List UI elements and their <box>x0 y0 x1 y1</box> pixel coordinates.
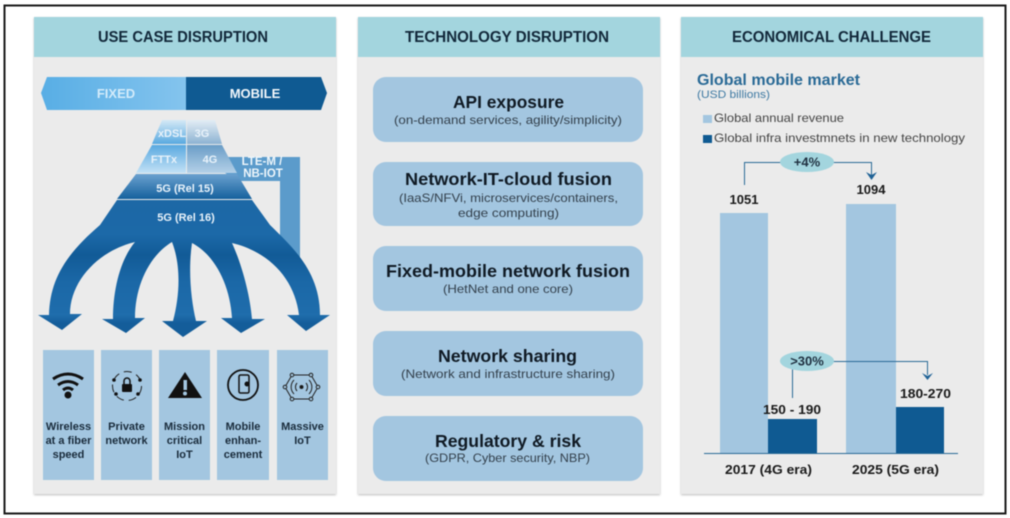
panel background <box>358 17 660 494</box>
pyramid: 5G Rel 15 <box>117 174 252 199</box>
banner: mobile <box>186 77 327 110</box>
heading: technology disruption: TECHNOLOGY DISRUPTION <box>405 29 609 46</box>
pyramid: xDSL <box>152 120 186 144</box>
arrow callout: >30% <box>780 351 933 398</box>
bar chart: 150 - 190 <box>763 402 821 417</box>
card: mission critical IoT <box>159 350 210 480</box>
card: Network-IT-cloud fusion: Network-IT-cloud fusion <box>405 169 612 189</box>
panel background <box>681 17 983 494</box>
heading: economical challenge: ECONOMICAL CHALLENGE <box>732 29 931 46</box>
pyramid: 3G <box>187 120 222 144</box>
card: private network <box>101 350 152 480</box>
heading: use case disruption: USE CASE DISRUPTION <box>98 29 268 46</box>
arrow callout: +4% <box>744 152 877 185</box>
banner: mobile: MOBILE <box>230 86 281 101</box>
chart title <box>697 72 861 101</box>
bar chart: 1051 <box>730 192 758 207</box>
card: Network-IT-cloud fusion: edge computing) <box>458 206 559 220</box>
bar chart: 1094 <box>857 182 886 197</box>
card: mobile enhancement: enhan- <box>225 435 261 447</box>
pyramid: 4G <box>187 145 237 173</box>
side bar: LTE-M / NB-IOT: NB-IOT <box>243 168 283 180</box>
card: wireless <box>43 350 94 480</box>
side bar: LTE-M / NB-IOT <box>222 156 300 258</box>
chart title: Global mobile market <box>697 72 861 89</box>
legend <box>703 111 965 145</box>
card: Network-IT-cloud fusion <box>373 162 643 226</box>
bar chart <box>704 182 958 477</box>
card: private network: Private <box>108 421 145 433</box>
heading: use case disruption <box>34 17 336 57</box>
card: mobile enhancement <box>217 350 269 480</box>
card: massive IoT: Massive <box>281 421 324 433</box>
card: wireless: Wireless <box>46 421 91 433</box>
card: fixed-mobile network fusion: (HetNet and one core) <box>443 282 573 296</box>
pyramid: 3G: 3G <box>195 128 209 140</box>
arrow callout: >30%: >30% <box>790 354 824 368</box>
card: mission critical IoT: IoT <box>176 449 193 461</box>
card: API exposure: API exposure <box>453 92 564 112</box>
pyramid: FTTx <box>136 145 186 173</box>
icon: wifi <box>53 374 83 398</box>
bar chart: 2017 (4G era) <box>725 462 812 477</box>
card: wireless: at a fiber <box>46 435 92 447</box>
card: massive IoT <box>277 350 328 480</box>
panel: use case disruption <box>34 17 336 494</box>
side bar: LTE-M / NB-IOT: LTE-M / <box>242 156 283 168</box>
card: wireless: speed <box>53 449 84 461</box>
legend: Global annual revenue <box>714 111 844 125</box>
pyramid: 5G Rel 15: 5G (Rel 15) <box>156 183 214 195</box>
card: regulatory and risk: Regulatory & risk <box>435 431 581 451</box>
arrows: 5G Rel 16 fan-out <box>38 200 330 337</box>
chart title: (USD billions) <box>697 89 770 101</box>
bar chart: 2025 (5G era) <box>852 462 939 477</box>
heading: technology disruption <box>358 17 660 57</box>
banner: fixed <box>41 77 186 110</box>
card: API exposure <box>373 77 643 142</box>
card: regulatory and risk: (GDPR, Cyber security, NBP) <box>425 451 590 465</box>
card: fixed-mobile network fusion: Fixed-mobile network fusion <box>386 261 630 281</box>
icon: mobile <box>228 370 258 400</box>
legend: Global infra investmnets in new technology <box>714 131 965 145</box>
card: API exposure: (on-demand services, agility/simplicity) <box>394 113 622 127</box>
panel: technology disruption <box>358 17 660 494</box>
pyramid: FTTx: FTTx <box>151 154 178 166</box>
card: fixed-mobile network fusion <box>373 246 643 311</box>
icon: warning triangle <box>168 372 202 398</box>
panel: economical challenge <box>681 17 983 494</box>
bar chart: 180-270 <box>900 386 951 401</box>
icon: lock <box>112 372 142 400</box>
arrow callout: +4%: +4% <box>794 154 821 170</box>
card: massive IoT: IoT <box>294 435 311 447</box>
card: regulatory and risk <box>373 416 643 481</box>
card: Network-IT-cloud fusion: (IaaS/NFVi, microservices/containers, <box>399 191 618 205</box>
card: mission critical IoT: Mission <box>164 421 205 433</box>
card: network sharing <box>373 331 643 396</box>
card: private network: network <box>105 435 148 447</box>
card: mission critical IoT: critical <box>167 435 202 447</box>
card: network sharing: Network sharing <box>438 346 577 366</box>
arrows: 5G Rel 16 fan-out: 5G (Rel 16) <box>157 212 215 224</box>
banner: fixed: FIXED <box>97 86 135 101</box>
card: mobile enhancement: Mobile <box>226 421 260 433</box>
icon: IoT hexagon <box>283 373 320 401</box>
pyramid: xDSL: xDSL <box>158 128 186 140</box>
card: mobile enhancement: cement <box>224 449 263 461</box>
pyramid: 4G: 4G <box>203 154 217 166</box>
heading: economical challenge <box>681 17 983 57</box>
panel background <box>34 17 336 494</box>
card: network sharing: (Network and infrastructure sharing) <box>401 367 615 381</box>
